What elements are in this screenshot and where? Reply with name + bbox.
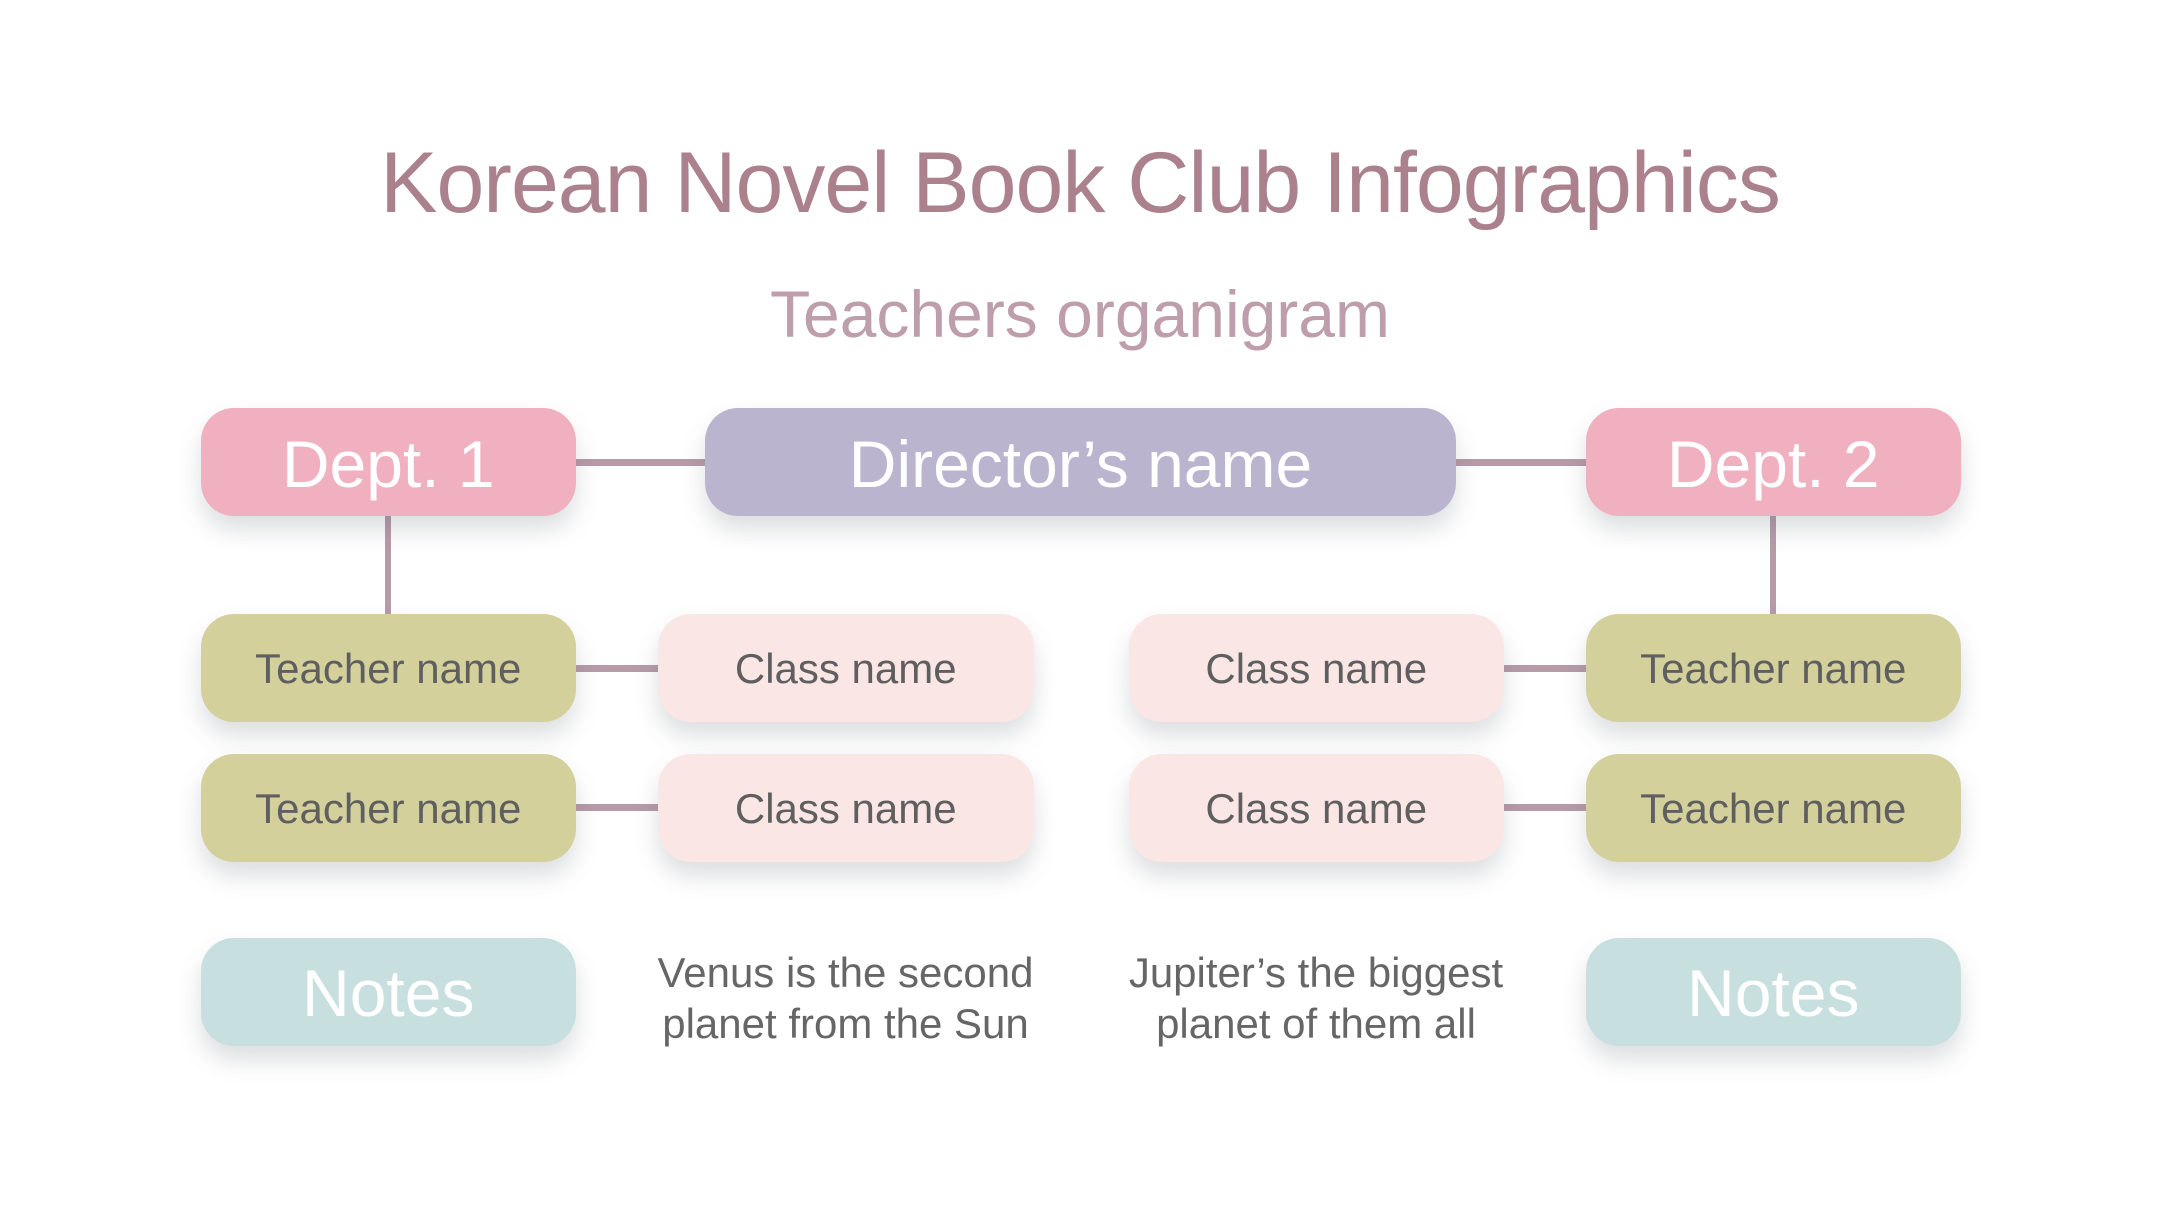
box: teacher row 1 right bbox=[1586, 614, 1961, 722]
box: teacher row 2 left bbox=[200, 754, 576, 862]
box: class row 2 right bbox=[1128, 754, 1504, 862]
connector: director to dept 2 bbox=[1455, 458, 1587, 466]
box: class row 1 right bbox=[1128, 614, 1504, 722]
text: Venus note: Venus is the second bbox=[658, 949, 1033, 996]
box: notes left: Notes bbox=[302, 956, 474, 1030]
box: teacher row 1 left: Teacher name bbox=[255, 645, 521, 692]
box: teacher row 2 right: Teacher name bbox=[1640, 785, 1906, 832]
box: notes right bbox=[1586, 938, 1961, 1046]
box: class row 1 left: Class name bbox=[735, 645, 957, 692]
box: teacher row 2 left: Teacher name bbox=[255, 785, 521, 832]
text: Venus note: planet from the Sun bbox=[662, 1000, 1029, 1046]
connector: class to teacher, row 2 right bbox=[1503, 804, 1587, 811]
box: class row 2 left: Class name bbox=[735, 785, 957, 832]
box: notes left bbox=[200, 938, 576, 1046]
subtitle: Teachers organigram bbox=[770, 277, 1390, 351]
connector: teacher to class, row 2 left bbox=[575, 804, 659, 811]
connector: dept 1 to director bbox=[575, 458, 707, 466]
box: teacher row 1 left bbox=[200, 614, 576, 722]
box: Dept. 2: Dept. 2 bbox=[1667, 427, 1880, 501]
box: class row 1 left bbox=[658, 614, 1034, 722]
box: Director's name: Director’s name bbox=[849, 427, 1312, 501]
connector: dept 1 to teacher bbox=[385, 515, 391, 614]
box: Dept. 1 bbox=[200, 408, 576, 516]
box: class row 1 right: Class name bbox=[1205, 645, 1427, 692]
connector: class to teacher, row 1 right bbox=[1503, 664, 1587, 672]
box: teacher row 2 right bbox=[1586, 754, 1961, 862]
box: Dept. 2 bbox=[1586, 408, 1961, 516]
text: Jupiter note: planet of them all bbox=[1156, 1000, 1476, 1046]
text: Venus note bbox=[658, 949, 1033, 1046]
box: notes right: Notes bbox=[1687, 956, 1859, 1030]
title: Korean Novel Book Club Infographics bbox=[380, 135, 1780, 231]
connector: teacher to class, row 1 left bbox=[575, 664, 659, 672]
connector: dept 2 to teacher bbox=[1770, 515, 1776, 614]
text: Jupiter note: Jupiter’s the biggest bbox=[1129, 949, 1503, 996]
text: Jupiter note bbox=[1129, 949, 1503, 1046]
box: class row 2 left bbox=[658, 754, 1034, 862]
box: Director's name bbox=[705, 408, 1456, 516]
box: teacher row 1 right: Teacher name bbox=[1640, 645, 1906, 692]
box: Dept. 1: Dept. 1 bbox=[282, 427, 495, 501]
box: class row 2 right: Class name bbox=[1205, 785, 1427, 832]
